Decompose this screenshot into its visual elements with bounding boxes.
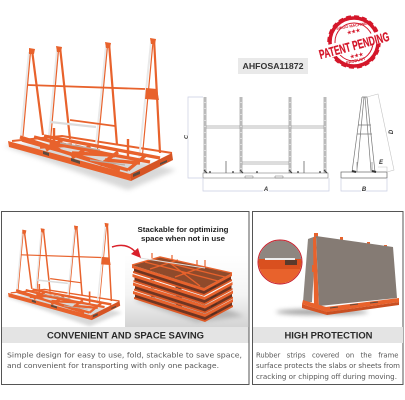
description text: Simple design for easy to use, fold, stackable to save space, — [7, 352, 242, 360]
heading band — [2, 327, 248, 343]
patent pending stamp: ★★★ — [347, 27, 362, 36]
stack caption: space when not in use — [141, 234, 225, 243]
dimension D and E: E — [379, 160, 384, 166]
dimension C — [184, 97, 203, 178]
stack background shading — [125, 255, 248, 327]
description text — [256, 352, 400, 381]
side-view technical drawing — [341, 97, 387, 178]
front-view technical drawing — [203, 97, 328, 178]
model number label — [238, 58, 308, 74]
model number label: AHFOSA11872 — [242, 61, 304, 71]
heading band — [253, 327, 403, 343]
stacked racks illustration — [132, 253, 244, 322]
dimension B — [341, 178, 387, 193]
description text — [7, 352, 242, 370]
description text: and convenient for transporting with only one package. — [7, 362, 219, 370]
heading band: HIGH PROTECTION — [284, 330, 372, 340]
magnified rubber strip detail — [258, 240, 302, 285]
panel: high protection — [252, 212, 403, 384]
dimension B: B — [362, 187, 367, 193]
red curved arrow — [112, 245, 141, 258]
top layer surface — [132, 257, 232, 288]
description text: cracking or chipping off during moving. — [256, 373, 397, 381]
patent pending stamp: PRODUCT — [345, 56, 366, 65]
heading band: CONVENIENT AND SPACE SAVING — [47, 330, 204, 340]
stack caption — [138, 225, 228, 243]
dimension A: A — [263, 187, 268, 193]
description text: surface protects the slabs or sheets from — [256, 362, 400, 370]
slab on rack illustration — [276, 233, 399, 315]
description text: Rubber strips covered on the frame — [256, 352, 398, 360]
patent pending stamp: ★★★ — [350, 51, 365, 60]
dimension D and E — [367, 94, 395, 172]
main rack illustration — [4, 38, 176, 190]
stack caption: Stackable for optimizing — [138, 225, 228, 234]
dimension C: C — [184, 134, 190, 139]
folded rack illustration — [5, 223, 122, 326]
patent pending stamp: SINGO MACHINES — [336, 21, 370, 31]
dimension D and E: D — [389, 129, 395, 134]
dimension A — [203, 178, 329, 193]
panel: convenient and space saving — [2, 212, 249, 384]
